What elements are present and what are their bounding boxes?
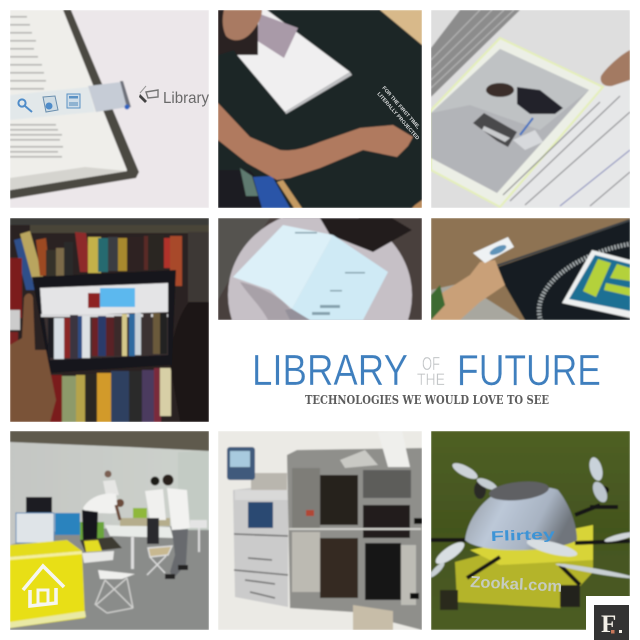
title word: of: OF	[422, 354, 440, 374]
icon: magnifier	[18, 99, 32, 112]
icon: document	[67, 94, 80, 108]
panel: card and table	[431, 218, 630, 320]
title word: the: THE	[417, 370, 445, 389]
panel: augmented reality shelf scan	[10, 218, 209, 422]
panel: makerspace room	[10, 431, 209, 630]
title word: library: LIBRARY	[252, 346, 408, 395]
panel: projected image on paper	[431, 10, 630, 208]
icon: house	[23, 566, 64, 606]
badge: F. logo: F	[601, 611, 616, 638]
title word: future: FUTURE	[457, 346, 601, 395]
text on mat: LITERALLY PROJECTED	[375, 91, 420, 142]
box label: Zookal.com	[470, 574, 563, 596]
panel: projected book on table	[218, 10, 422, 208]
panel: delivery drone	[428, 431, 636, 630]
logo text: Library	[163, 90, 209, 107]
propeller arms	[431, 505, 630, 585]
subtitle: TECHNOLOGIES WE WOULD LOVE TO SEE	[305, 393, 549, 407]
panel: espresso book machine	[218, 431, 422, 630]
icon: library logo	[139, 86, 158, 103]
icon: heart document	[43, 96, 58, 112]
dome label: Flirtey	[491, 526, 555, 544]
badge: F. logo	[586, 596, 640, 640]
title	[252, 346, 601, 395]
panel: projected open book	[218, 218, 422, 320]
panel: smart bookmark	[10, 10, 209, 208]
lower shelf books	[50, 368, 171, 422]
text on mat: FOR THE FIRST TIME,	[380, 85, 421, 131]
upper shelf books drawn as strips	[10, 231, 182, 352]
